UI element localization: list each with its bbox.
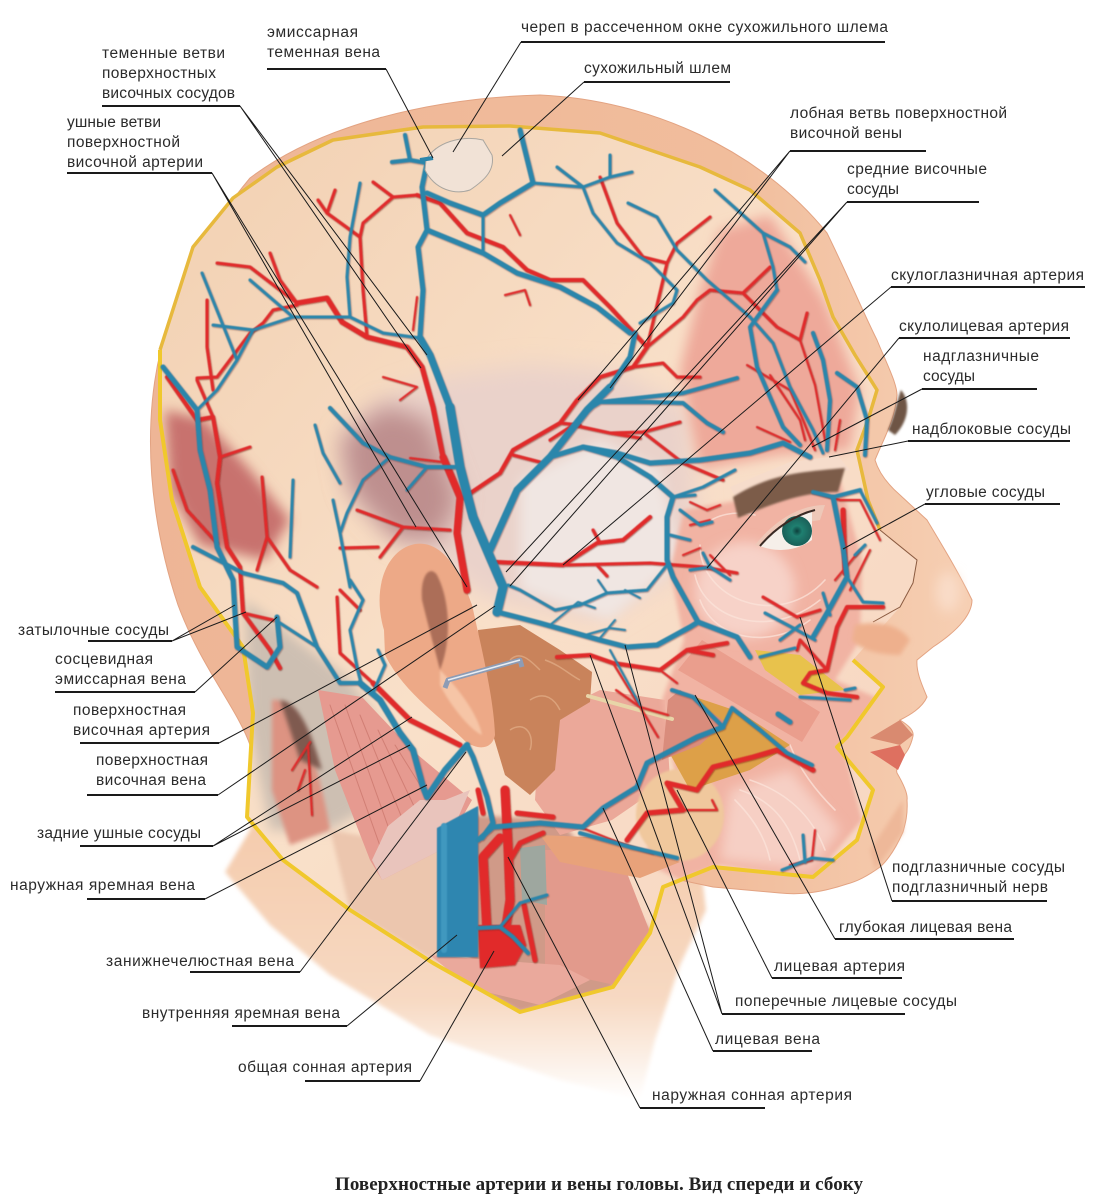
trunk base [497,587,503,612]
label: occipital vessels [18,605,246,641]
eyebrow hair [733,468,845,518]
zygomatic muscle [678,640,820,742]
label: supraorbital vessels: надглазничные [923,348,1039,365]
label: auricular branches: ушные ветви [67,114,161,131]
label: supraorbital vessels [812,348,1039,447]
angular top vein [813,490,860,497]
forehead vein 3 [715,190,805,290]
vertical cheek vein [667,497,698,622]
occipital muscle [165,410,290,560]
frontal branch middle [587,378,737,432]
facial artery [627,750,813,840]
forehead vein 2 [750,290,800,445]
occipital branches [173,300,317,620]
label: facial vein: лицевая вена [715,1031,820,1048]
angular vein [813,497,847,637]
occipital artery [167,377,280,668]
label: transverse facial vessels: поперечные лицевые сосуды [735,993,957,1010]
label: internal jugular vein: внутренняя яремная вена [142,1005,340,1022]
occipital top arteries [197,182,417,378]
labial arteries [803,607,883,697]
nose highlight [936,572,960,612]
label: frontal branch: лобная ветвь поверхностной [790,105,1007,122]
mandible muscle patch [662,690,725,760]
facial muscles [640,480,882,880]
label: mastoid emissary vein [55,617,277,692]
label: zygomatico-orbital artery [563,267,1085,565]
chin artery [790,830,815,865]
figure caption: Поверхностные артерии и вены головы. Вид спереди и сбоку [335,1174,864,1195]
sternocleidomastoid tendon [372,790,470,880]
anterior forehead arteries [513,177,807,462]
mid-neck veins [478,927,528,953]
nasal arteries [813,492,880,590]
eye white [760,512,812,550]
orbital muscle highlight [695,542,795,638]
frontalis arteries [747,340,840,450]
transverse vein [497,612,750,657]
nape artery [292,742,312,815]
cut neck band [430,955,590,1005]
label: angular vessels [843,484,1060,549]
neck recess [272,700,330,845]
small branches of temporal artery [383,215,530,462]
label: middle temporal vessels: сосуды [847,181,899,198]
vein behind ear branches [290,425,427,587]
nape fascia [240,600,384,835]
label: auricular branches: поверхностной [67,134,180,151]
label: auricular branches: височной артерии [67,154,203,171]
label: internal jugular vein [142,935,457,1026]
internal jugular vein [437,806,478,957]
label: skull in window: череп в рассеченном окне сухожильного шлема [521,19,888,36]
infraorbital arteries [763,597,827,670]
sternocleidomastoid muscle [318,690,472,880]
carotid branches [478,790,553,960]
lower neck fascia [330,830,440,965]
retractor highlight [448,660,520,680]
label: transverse facial vessels [590,645,957,1014]
facial vein [478,727,723,840]
label: infraorbital vessels and nerve: подглазничные сосуды [892,859,1065,876]
frontalis muscle [680,215,860,470]
label: posterior auricular vessels [37,717,412,846]
label: superficial temporal vein: височная вена [96,772,206,789]
label: superficial temporal artery: поверхностная [73,702,186,719]
label: external jugular vein [10,785,427,899]
label: zygomatico-orbital artery: скулоглазничная артерия [891,267,1084,284]
emissary vein [392,135,433,163]
ear helix [380,544,495,747]
superficial temporal vein trunk [450,407,503,587]
jugular highlight [441,826,447,950]
label: external carotid artery [508,857,852,1108]
dissected window [140,110,940,1030]
nose ala [852,623,910,655]
posterior auricular veins [277,580,385,695]
external carotid artery [505,790,510,932]
zygomatico-orbital artery [497,517,650,565]
eyebrow outer hair [888,390,907,435]
label: parietal branches: височных сосудов [102,85,235,102]
supraorbital vein [550,443,810,463]
label: parietal branches [102,45,427,368]
neck recess shadow [280,700,322,770]
mandible edge [540,835,680,878]
label: auricular branches [67,114,467,587]
masseter muscle [535,690,670,835]
supratrochlear veins [813,333,830,450]
frontal branch thick [490,387,610,550]
buccal stub [778,714,790,722]
brow ridge [730,456,850,505]
internal carotid artery [483,838,500,932]
eyelash [760,510,815,546]
label: frontal branch [578,105,1007,400]
head skin silhouette [150,95,972,894]
label: retromandibular vein [106,752,466,972]
twigs on transverse vein [550,602,640,705]
external jugular upper [193,547,360,683]
lip vein [760,648,855,720]
label: zygomaticofacial artery [707,318,1070,568]
label: mastoid emissary vein: эмиссарная вена [55,671,186,688]
label: angular vessels: угловые сосуды [926,484,1045,501]
occipital vein [163,367,280,667]
temple vein [508,565,667,610]
label: parietal branches: теменные ветви [102,45,225,62]
transverse from junction [673,470,735,525]
arteries behind ear [337,510,450,683]
posterior auricular artery [373,683,460,745]
label: supratrochlear vessels [829,421,1071,457]
label: mastoid emissary vein: сосцевидная [55,651,153,668]
label: external carotid artery: наружная сонная артерия [652,1087,852,1104]
exposed galea base [162,128,916,927]
chin veins [782,835,833,870]
upper eyelid [755,505,825,548]
neck grey gap [520,845,547,905]
upper lip [870,720,913,745]
label: posterior auricular vessels: задние ушные сосуды [37,825,201,842]
vein to temporal region [330,408,460,467]
vein to forehead [427,230,630,333]
parietal vein upper trunk [420,338,450,407]
label: galea [502,60,731,156]
transverse facial artery [557,643,727,670]
label: galea: сухожильный шлем [584,60,731,77]
label: facial artery: лицевая артерия [774,958,905,975]
label: supratrochlear vessels: надблоковые сосуды [912,421,1071,438]
chin muscle highlight [720,770,840,870]
arteries [167,177,883,968]
label: occipital vessels: затылочные сосуды [18,622,169,639]
label: infraorbital vessels and nerve: подглазничный нерв [892,879,1048,896]
label: supraorbital vessels: сосуды [923,368,975,385]
supratrochlear right [837,373,867,455]
middle forehead arteries [550,422,723,480]
parietal artery branch [297,298,443,457]
label: facial vein [603,808,820,1051]
label: superficial temporal vein [87,606,495,795]
top branches [483,155,677,323]
label: emissary parietal vein: эмиссарная [267,24,358,41]
frontal branch upper [610,333,635,387]
iris [782,516,812,546]
label: middle temporal vessels: средние височные [847,161,987,178]
nasal vein [823,490,883,615]
parietal vein [418,163,427,337]
label: frontal branch: височной вены [790,125,902,142]
periorbital arteries [683,502,730,575]
lower lip [870,745,905,770]
occipital upper veins [197,273,420,410]
neck skin [225,740,706,1100]
common carotid base [478,925,526,968]
long frontal artery [417,195,647,347]
temporal muscle grey zone [404,369,694,608]
deep facial vein [672,690,812,765]
retromandibular vein [467,745,493,838]
orbicularis fibres [695,513,835,860]
skull in window [420,138,493,192]
forehead veins [628,203,823,453]
label: superficial temporal artery: височная артерия [73,722,210,739]
label: common carotid artery [238,951,494,1081]
label: deep facial vein [695,695,1014,939]
label: emissary parietal vein: теменная вена [267,44,380,61]
veins [163,130,883,957]
angular artery [843,510,845,573]
vein from galea window [427,130,533,215]
nose incision line [873,530,917,622]
periorbital vein [670,535,730,580]
chin shadow [870,800,903,870]
label: middle temporal vessels [506,161,987,586]
infraorbital fat [755,650,845,695]
metal retractor [445,660,522,688]
label: infraorbital vessels and nerve [800,617,1065,901]
galea cut edge [425,138,493,192]
label: deep facial vein: глубокая лицевая вена [839,919,1012,936]
vein over skull [420,158,433,160]
yellow fat [671,698,790,788]
label: retromandibular vein: занижнечелюстная вена [106,953,294,970]
neck muscle [545,850,650,985]
small temple vein twigs [598,580,640,598]
vein rising on parietal [347,183,360,317]
buccal fat [636,769,724,861]
yellow fascia edge line lower [160,350,883,1012]
facial artery branch [580,800,717,853]
label: emissary parietal vein [267,24,433,158]
transverse branches [613,663,677,737]
facial vein lower [580,833,677,858]
ear [380,544,522,747]
label: parietal branches: поверхностных [102,65,216,82]
label: zygomaticofacial artery: скулолицевая артерия [899,318,1069,335]
neck vein branch [500,895,547,927]
label: skull in window [453,19,888,152]
infraorbital vein [765,613,815,640]
ear lobe highlight [440,670,482,735]
temporal muscle pale zone [520,440,680,620]
superficial temporal artery trunk [443,457,467,590]
zygomatic lower artery [563,530,737,576]
wooden probe [588,696,672,719]
label: superficial temporal vein: поверхностная [96,752,208,769]
sternocleidomastoid fibres [330,704,430,844]
parotid gland [478,625,592,795]
parotid lobules [510,656,580,750]
temporal muscle dark zone [340,405,460,540]
external jugular vein [360,683,467,797]
label: external jugular vein: наружная яремная вена [10,877,195,894]
frontal artery rising [460,347,647,500]
label: facial artery [677,790,905,978]
lower neck deep tissue [470,815,650,1012]
ear inner fold [422,571,448,670]
label: common carotid artery: общая сонная артерия [238,1059,412,1076]
yellow fascia edge line [160,126,880,530]
label: superficial temporal artery [73,605,477,743]
lower supraorbital branch [583,447,673,497]
